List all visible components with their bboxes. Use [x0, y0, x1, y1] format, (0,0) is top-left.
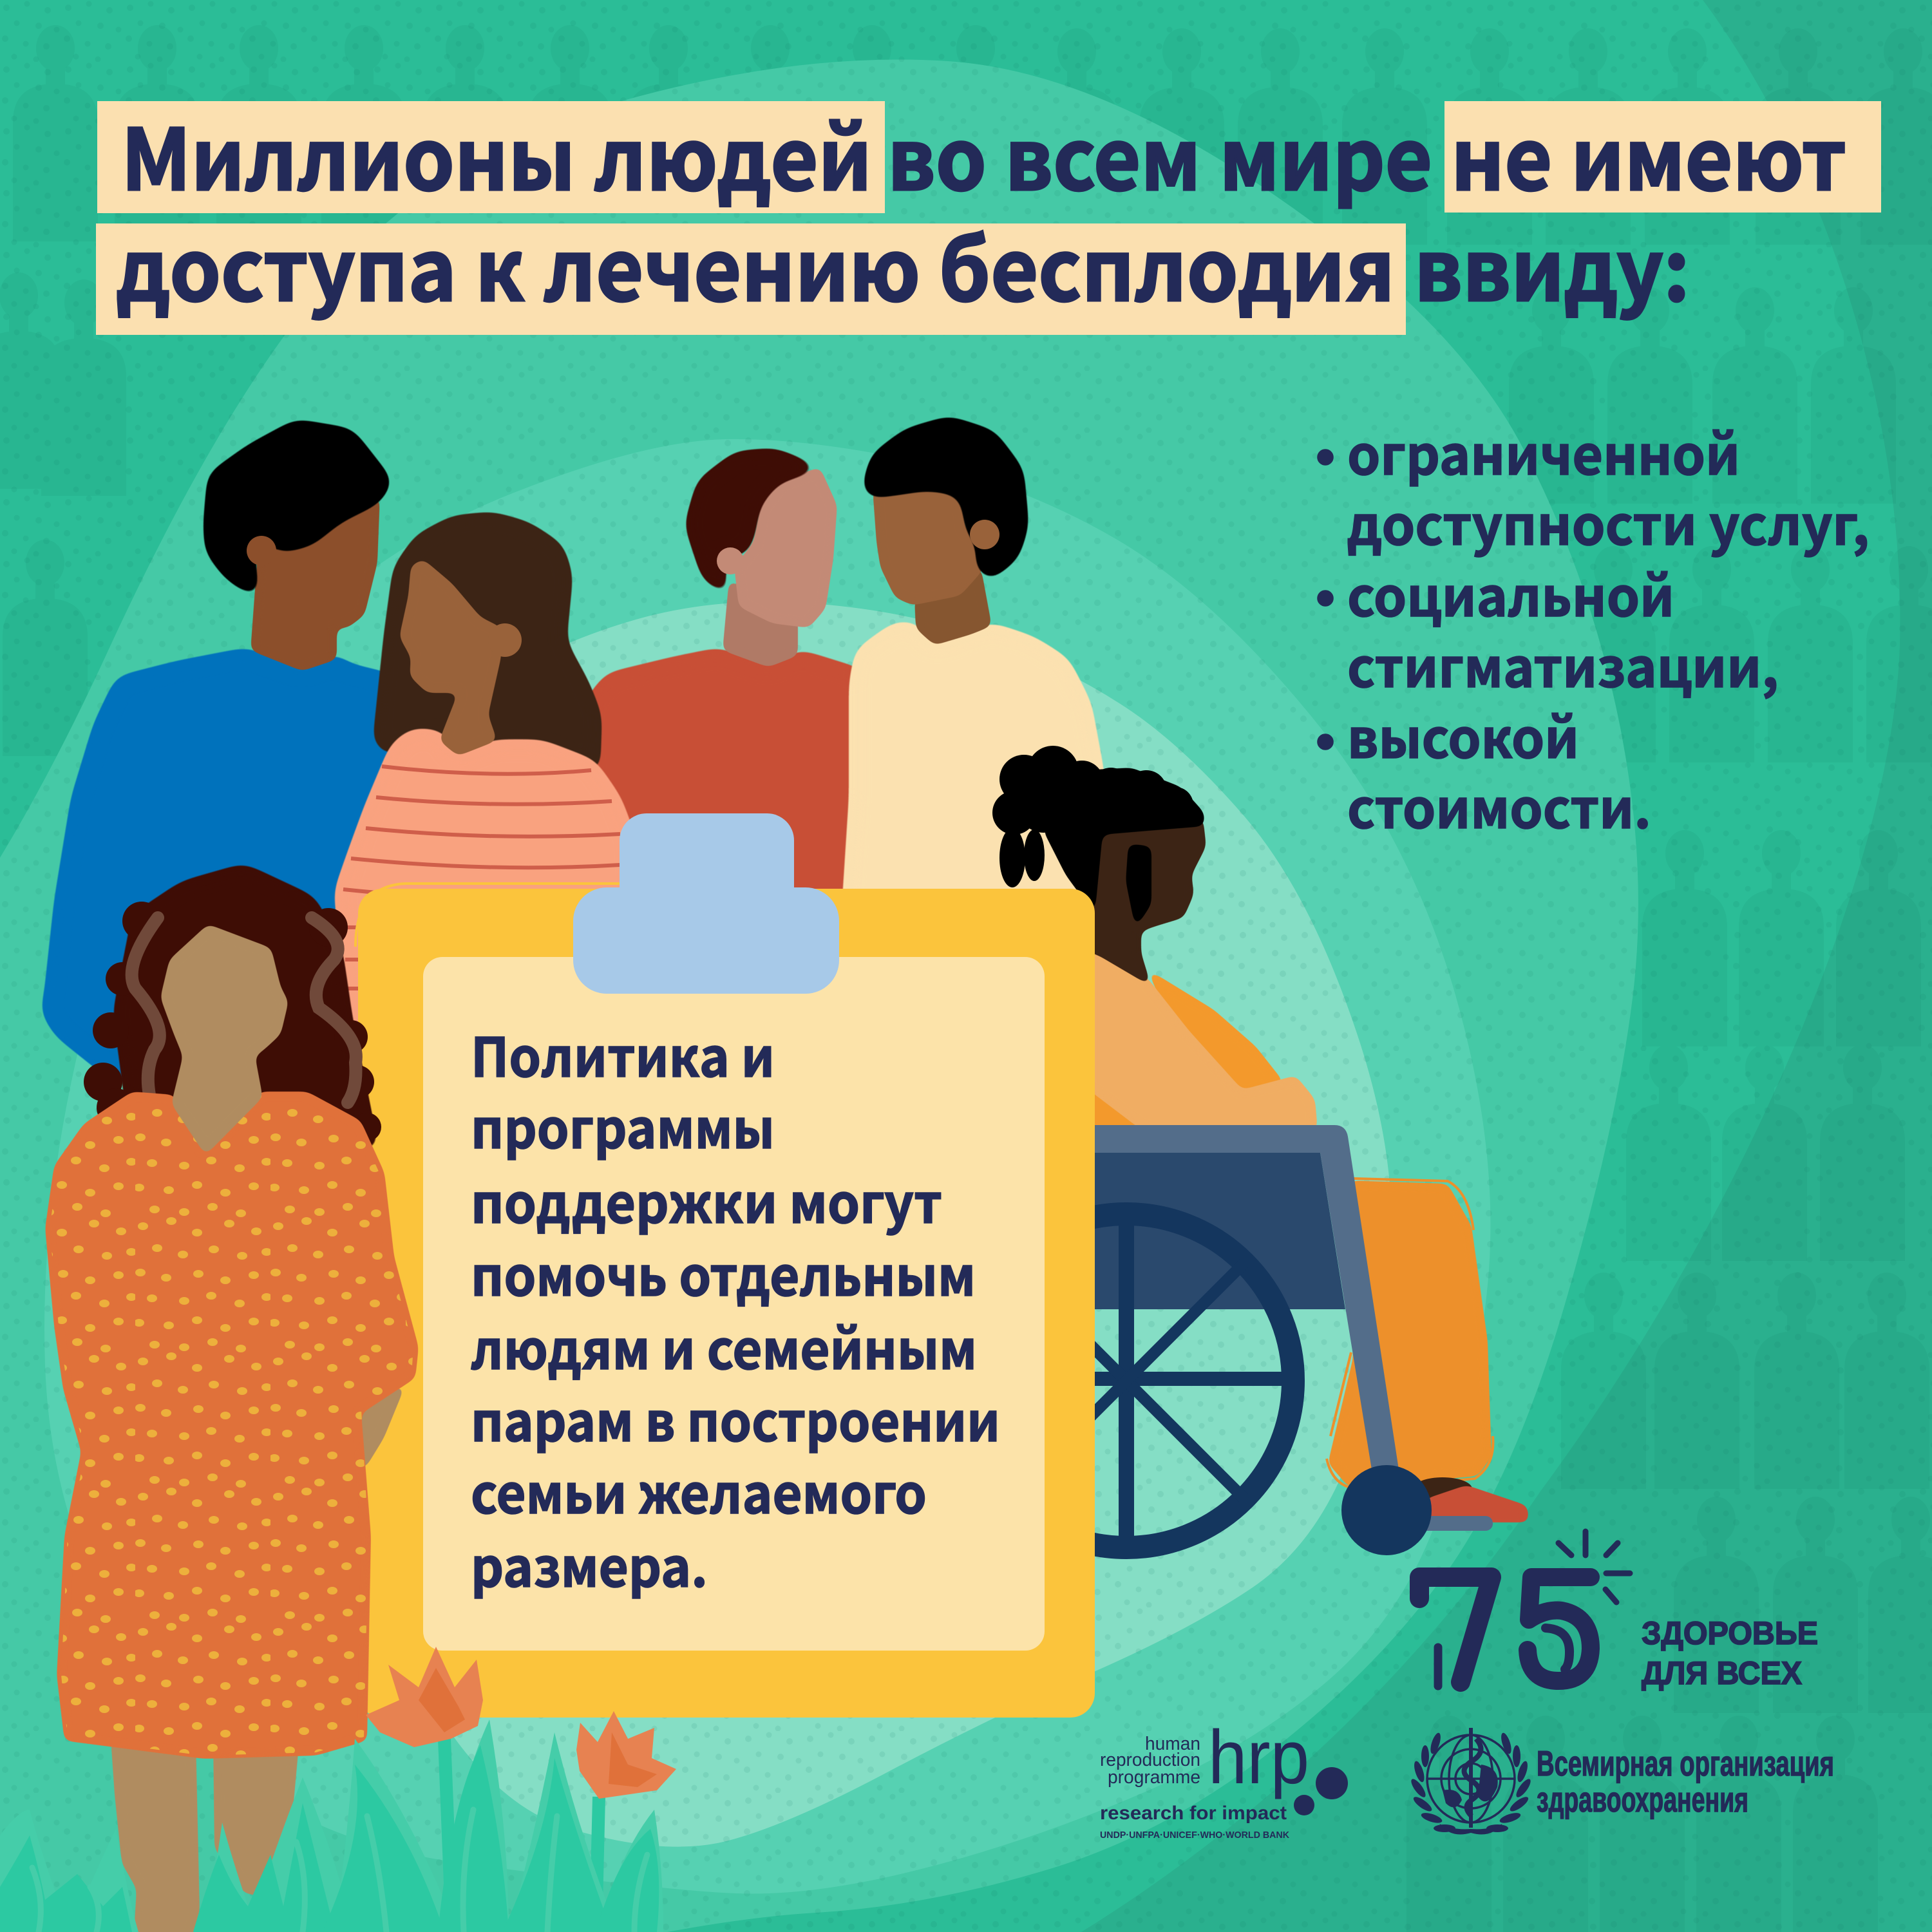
bullet list: стигматизации,	[1347, 625, 1779, 703]
chair back panel	[1088, 1153, 1345, 1309]
pale grass streaks	[32, 1810, 647, 1932]
caster wheel	[1341, 1465, 1432, 1555]
logo text: World Health Organization	[1537, 1743, 1834, 1819]
logo: 75 years	[1419, 1531, 1630, 1686]
card text: парам в построении	[471, 1379, 1000, 1457]
logo: hrp: human	[1145, 1734, 1200, 1754]
bullet list: доступности услуг,	[1347, 483, 1870, 561]
long hair	[84, 863, 381, 1153]
ear	[247, 536, 276, 565]
logo text: health for all: ДЛЯ ВСЕХ	[1642, 1655, 1802, 1691]
logo: hrp: hrp	[1208, 1715, 1309, 1800]
card paper	[423, 957, 1045, 1651]
neck and head	[1088, 818, 1206, 987]
hair with curls	[992, 746, 1204, 929]
flower stems	[444, 1739, 599, 1932]
armrest and frame	[1088, 1125, 1399, 1470]
logo text: health for all	[1642, 1615, 1818, 1691]
card text	[471, 1015, 1000, 1603]
person: woman in wheelchair	[960, 746, 1529, 1555]
person: woman in striped top	[334, 511, 644, 1075]
title highlight bars	[96, 101, 1881, 335]
main grass blades	[0, 1745, 659, 1932]
logo text: World Health Organization: здравоохранения	[1537, 1779, 1748, 1819]
logo: hrp	[1100, 1715, 1348, 1841]
logo text: health for all: ЗДОРОВЬЕ	[1642, 1615, 1818, 1651]
card text: семьи желаемого	[471, 1452, 927, 1530]
title line 1	[121, 92, 1846, 214]
person: man in blue sweater	[40, 419, 438, 1127]
card text: программы	[471, 1086, 775, 1164]
ear	[717, 547, 744, 574]
logo: hrp: research for impact	[1100, 1803, 1287, 1824]
torso	[1146, 968, 1285, 1098]
bullet list: стоимости.	[1347, 766, 1651, 844]
bullet list: высокой	[1347, 696, 1579, 774]
title line 2: ввиду:	[1414, 203, 1690, 325]
title line 1: не имеют	[1451, 92, 1846, 214]
dress dots	[50, 1095, 413, 1756]
wheel	[960, 1214, 1293, 1548]
person: man in cream shirt	[840, 415, 1108, 927]
card text: людям и семейным	[471, 1307, 977, 1385]
card board	[358, 889, 1095, 1718]
card text: поддержки могут	[471, 1161, 942, 1239]
foot and footrest	[1413, 1477, 1472, 1501]
logo: hrp: reproduction	[1100, 1750, 1200, 1770]
clipboard card	[355, 813, 1095, 1718]
dress	[45, 1092, 419, 1759]
clip	[573, 813, 839, 994]
logo: WHO emblem	[1409, 1728, 1533, 1835]
pale grass blades	[0, 1719, 663, 1932]
bullet list: ограниченной	[1347, 413, 1740, 491]
face and neck	[160, 924, 289, 1155]
trousers	[1328, 1180, 1492, 1488]
rays	[1558, 1531, 1630, 1602]
title line 2: доступа к лечению бесплодия	[117, 203, 1395, 325]
person: woman in orange dotted dress	[45, 863, 419, 1932]
title line 1: во всем мире	[887, 92, 1432, 214]
grass and flowers	[0, 1647, 676, 1932]
legs	[111, 1739, 200, 1932]
bullet list: социальной	[1347, 554, 1674, 632]
title line 1: Миллионы людей	[121, 92, 872, 214]
bullet list	[1318, 413, 1870, 844]
shirt stripes	[343, 766, 620, 989]
card text: помочь отдельным	[471, 1234, 976, 1312]
ear	[970, 520, 999, 549]
logo: hrp: programme	[1108, 1767, 1200, 1788]
hair highlights	[132, 918, 356, 1103]
logo: hrp: UNDP·UNFPA·UNICEF·WHO·WORLD BANK	[1100, 1830, 1289, 1841]
arms	[64, 1378, 97, 1455]
tulip 2	[576, 1711, 676, 1799]
person: man in red sweater	[583, 448, 866, 927]
card text: размера.	[471, 1525, 708, 1603]
tulip 1	[366, 1647, 483, 1747]
title	[96, 92, 1881, 335]
card text: Политика и	[471, 1015, 775, 1093]
